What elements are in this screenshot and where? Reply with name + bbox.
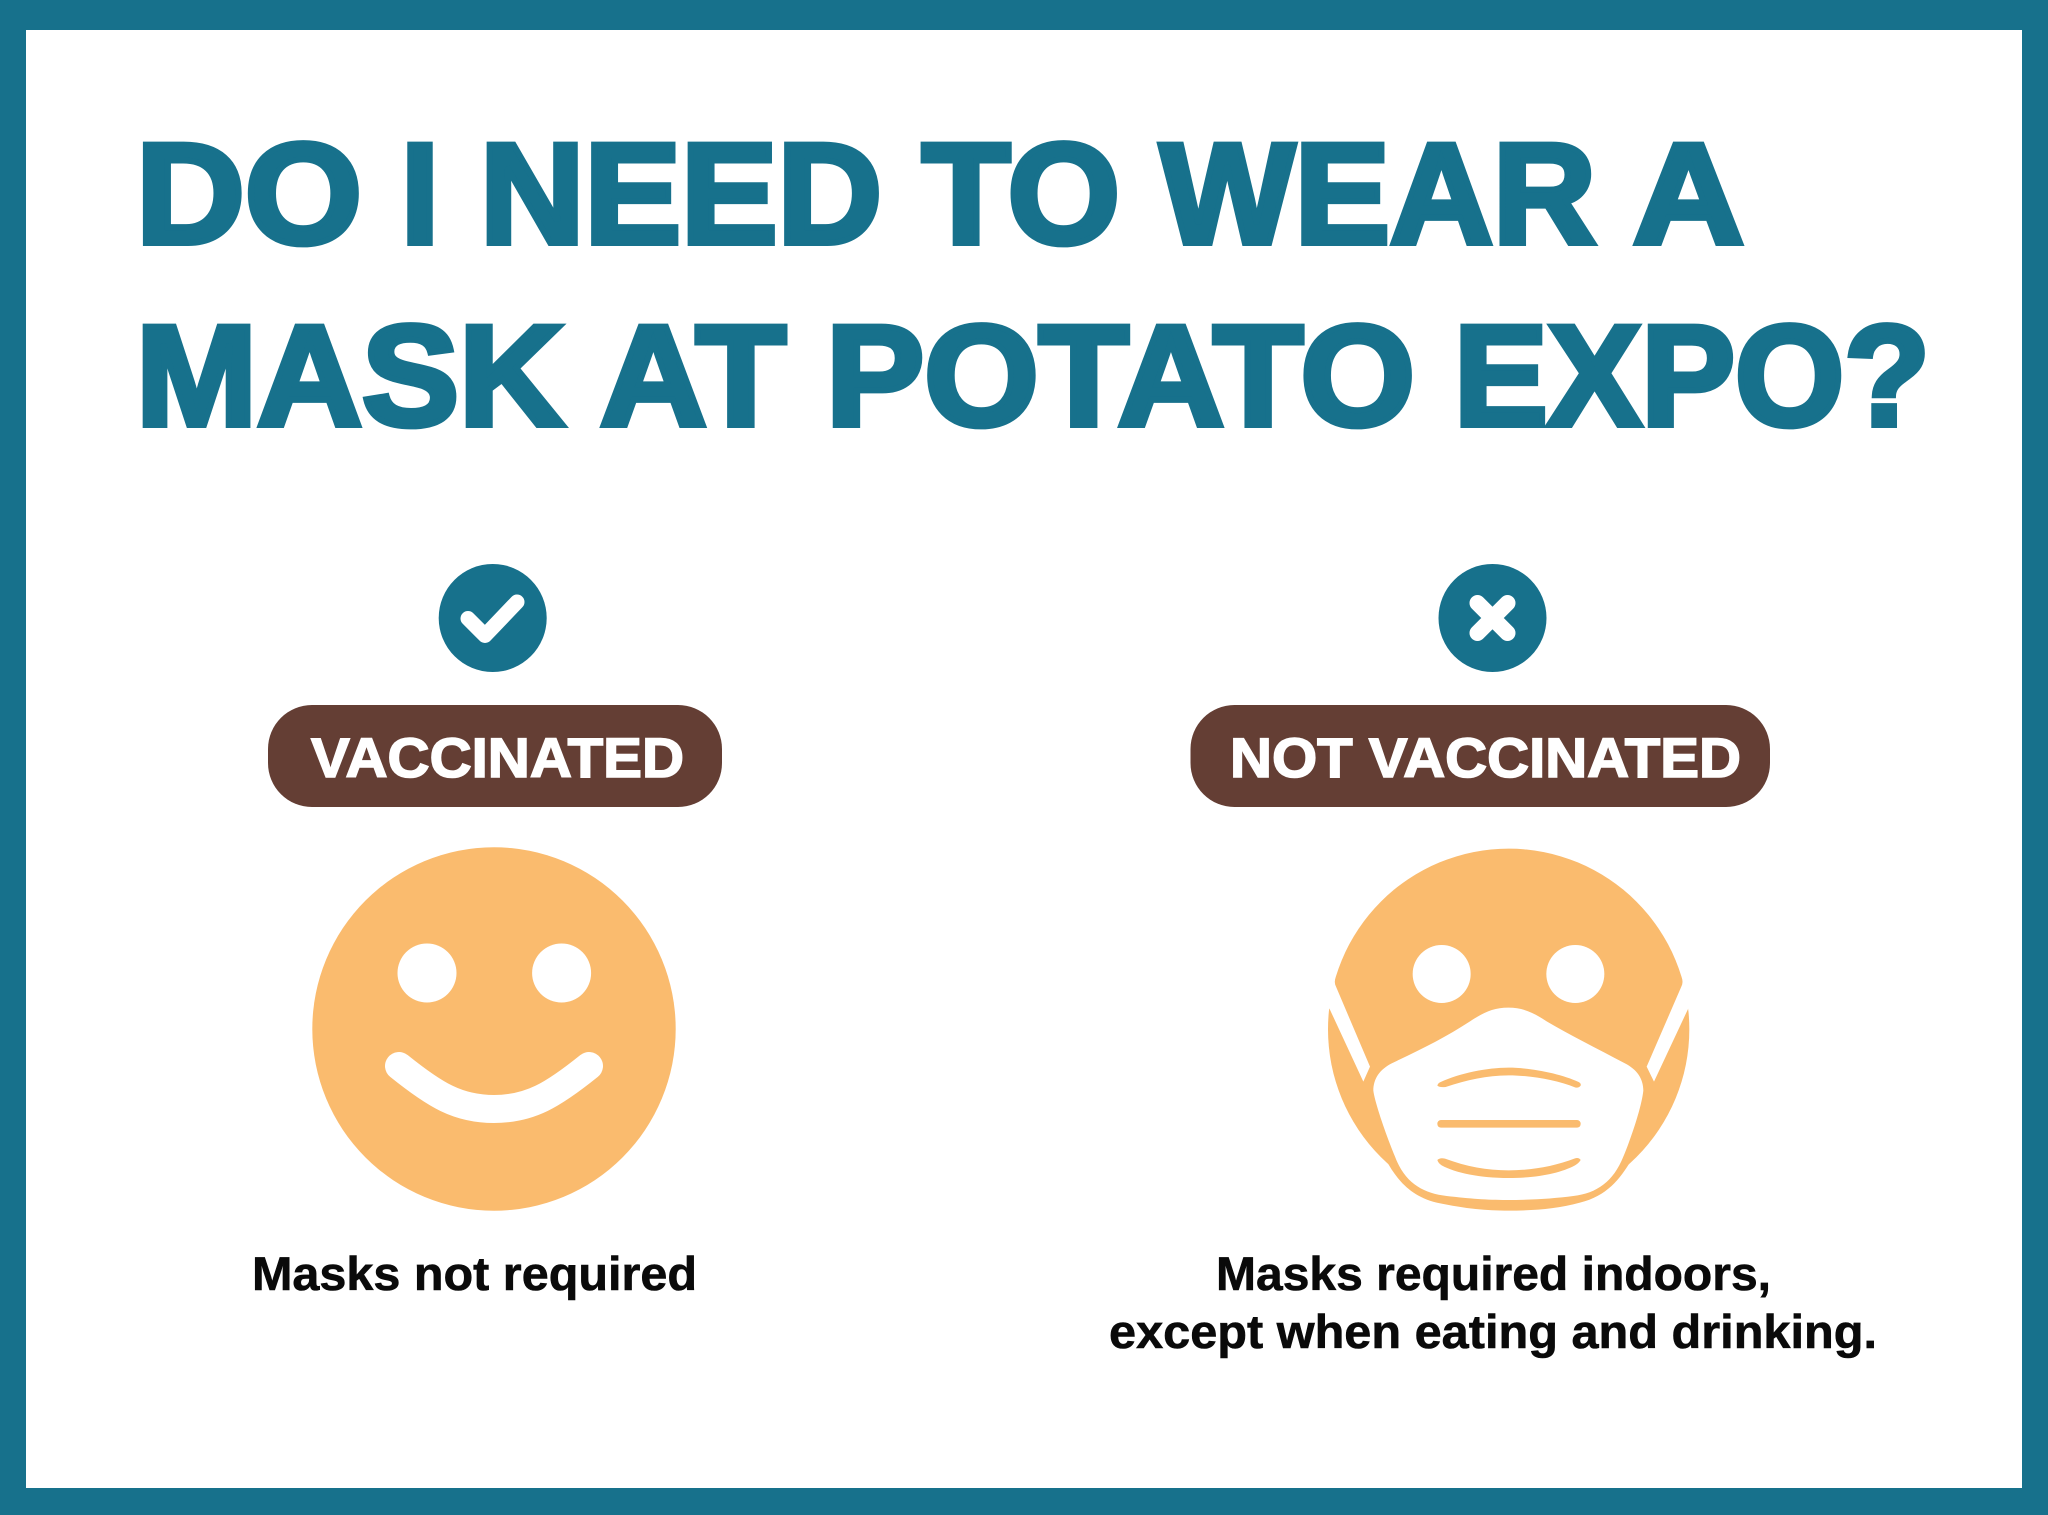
- icon: cross mark: [1438, 564, 1546, 672]
- title: DO: [136, 115, 362, 274]
- title: MASK: [136, 297, 564, 456]
- icon: check mark: [439, 564, 547, 672]
- label: vaccinated: [268, 705, 722, 807]
- label: vaccinated: VACCINATED: [311, 726, 684, 789]
- title: TO: [922, 115, 1120, 274]
- title: AT: [600, 297, 786, 456]
- text: masks not required: Masks not required: [252, 1247, 697, 1300]
- panel: vaccinated: [252, 564, 722, 1300]
- icon: smiling face: [312, 847, 676, 1211]
- title: NEED: [480, 115, 882, 274]
- title: I: [401, 115, 439, 274]
- title: [136, 115, 1930, 456]
- title: POTATO: [826, 297, 1415, 456]
- title: WEAR: [1160, 115, 1596, 274]
- panel: not vaccinated: [1109, 564, 1877, 1358]
- text: masks required indoors: [1109, 1247, 1877, 1358]
- text: masks required indoors: except when eating and drinking.: [1109, 1305, 1877, 1358]
- title: A: [1633, 115, 1744, 274]
- icon: face wearing mask: [1317, 849, 1701, 1211]
- text: masks required indoors: Masks required indoors,: [1216, 1247, 1771, 1300]
- label: not vaccinated: NOT VACCINATED: [1230, 726, 1741, 789]
- label: not vaccinated: [1190, 705, 1770, 807]
- title: EXPO?: [1454, 297, 1930, 456]
